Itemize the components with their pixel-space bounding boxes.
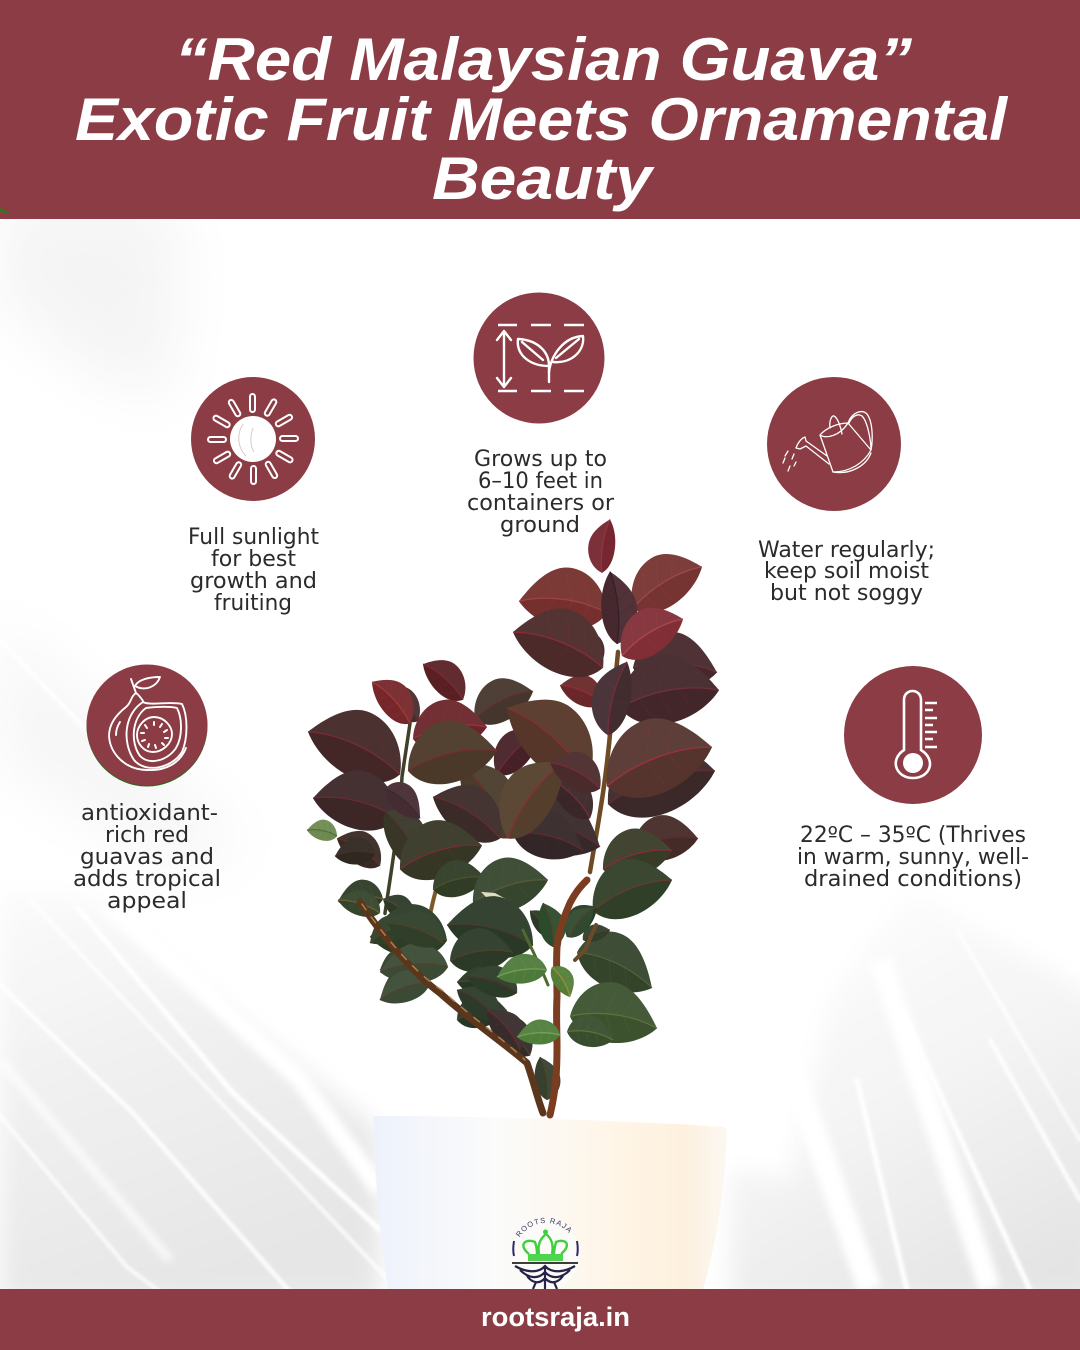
logo on pot: ROOTS RAJA xyxy=(516,1218,571,1237)
text: antioxidant: adds tropical xyxy=(73,867,221,892)
main stems xyxy=(360,880,596,1115)
text: temperature: in warm, sunny, well- xyxy=(797,845,1029,870)
text: sunlight: Full sunlight xyxy=(188,525,319,550)
text: height: ground xyxy=(500,513,580,538)
text: sunlight: fruiting xyxy=(214,591,292,616)
text: antioxidant: appeal xyxy=(107,889,187,914)
bright young leaves xyxy=(494,951,581,1046)
text: height: 6–10 feet in xyxy=(478,469,603,494)
title: “Red Malaysian Guava” xyxy=(175,26,912,93)
icon: thermometer in circle xyxy=(844,666,982,804)
text: temperature: 22ºC – 35ºC (Thrives xyxy=(800,823,1026,848)
title xyxy=(75,26,1008,212)
text: water: Water regularly; xyxy=(758,538,935,563)
text: height xyxy=(467,447,615,538)
text: sunlight xyxy=(188,525,319,616)
footer banner xyxy=(0,1289,1080,1350)
text: sunlight: growth and xyxy=(190,569,317,594)
title: Exotic Fruit Meets Ornamental xyxy=(75,86,1008,153)
upper foliage and stems xyxy=(301,516,722,1065)
text: water xyxy=(758,538,935,606)
text: height: containers or xyxy=(467,491,615,516)
text: temperature xyxy=(797,823,1029,892)
header banner xyxy=(0,0,1080,219)
text: temperature: drained conditions) xyxy=(804,867,1022,892)
plant photo illustration xyxy=(301,516,722,1115)
text: sunlight: for best xyxy=(211,547,296,572)
icon: guava in circle xyxy=(86,664,208,786)
text: height: Grows up to xyxy=(474,447,607,472)
website: rootsraja.in xyxy=(481,1302,630,1332)
text: water: keep soil moist xyxy=(764,559,929,584)
title: Beauty xyxy=(432,145,655,212)
icon: watering can in circle xyxy=(767,377,901,511)
logo on pot xyxy=(512,1218,580,1289)
pot xyxy=(373,1116,727,1289)
icon: plant height in circle xyxy=(474,292,604,424)
icon: sun in circle xyxy=(191,377,315,501)
lower foliage xyxy=(335,884,612,1101)
text: antioxidant: guavas and xyxy=(80,845,214,870)
text: antioxidant: antioxidant- xyxy=(81,801,218,826)
text: antioxidant xyxy=(73,801,221,914)
text: water: but not soggy xyxy=(770,581,923,606)
text: antioxidant: rich red xyxy=(105,823,189,848)
